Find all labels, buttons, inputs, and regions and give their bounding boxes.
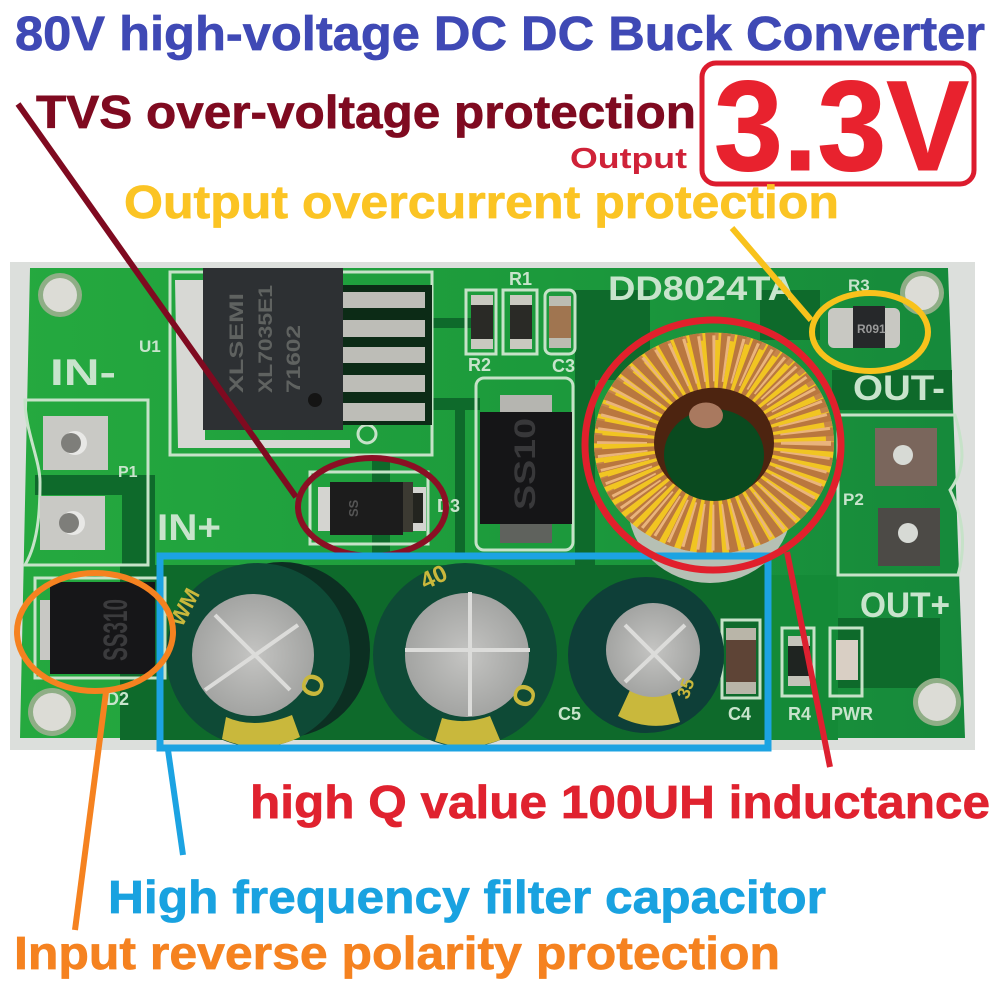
board outlines — [25, 272, 963, 698]
TVS diode: SS — [346, 499, 361, 517]
arrow: inductor pointer — [787, 552, 830, 767]
highlight: inductor — [585, 320, 841, 570]
title: 80V high-voltage DC DC Buck Converter — [15, 8, 985, 61]
board silk labels: IN- — [50, 352, 116, 393]
highlight: overcurrent resistor — [812, 293, 928, 371]
highlight: TVS diode — [298, 458, 446, 556]
board silk labels: P1 — [118, 464, 138, 481]
board silk labels: C5 — [558, 704, 581, 724]
input diode SS310 — [40, 582, 155, 674]
capacitor 1 — [164, 562, 370, 747]
board silk labels: R4 — [788, 704, 811, 724]
board silk labels: DD8024TA — [608, 270, 795, 308]
current sense resistor R3 — [828, 306, 900, 348]
highlight: input diode — [17, 573, 173, 691]
U1 regulator: XL7035E1 — [256, 284, 277, 393]
board silk labels: U1 — [139, 337, 161, 356]
board silk labels: C3 — [552, 356, 575, 376]
circuit board photo — [10, 262, 975, 750]
output voltage badge: 3.3V — [714, 55, 969, 198]
board silk labels: OUT+ — [860, 586, 950, 625]
board silk labels: R3 — [848, 276, 870, 295]
board silk labels: R1 — [509, 269, 532, 289]
label: input reverse polarity protection: Input reverse polarity protection — [14, 927, 780, 979]
capacitor 3 — [568, 577, 724, 733]
capacitor 1: O — [294, 669, 333, 703]
label: TVS over-voltage protection: TVS over-voltage protection — [36, 86, 696, 138]
U1 regulator: 71602 — [284, 325, 305, 393]
board silk labels: PWR — [831, 704, 873, 724]
SS10 diode — [480, 395, 572, 543]
current sense resistor R3: R091 — [857, 322, 886, 336]
label: Output: Output — [570, 143, 687, 175]
board silk labels — [50, 269, 950, 724]
label: high frequency filter capacitor: High frequency filter capacitor — [108, 871, 826, 923]
arrow: overcurrent pointer — [732, 228, 811, 320]
board silk labels: P2 — [843, 490, 864, 509]
toroid inductor — [594, 333, 834, 553]
dark traces — [35, 290, 952, 740]
board silk labels: C4 — [728, 704, 751, 724]
resistors and small caps — [471, 295, 858, 694]
board silk labels: IN+ — [157, 507, 221, 548]
board silk labels: OUT- — [853, 369, 945, 408]
pcb — [20, 268, 965, 738]
silver ring under inductor — [628, 427, 792, 583]
SS10 diode: SS10 — [509, 418, 542, 510]
arrow: reverse polarity pointer — [75, 692, 106, 930]
label: high Q value inductance: high Q value 100UH inductance — [250, 776, 990, 828]
capacitor 2: 40 — [416, 560, 452, 595]
capacitor 2 — [373, 560, 557, 747]
TVS diode — [318, 482, 426, 535]
board silk labels: D3 — [437, 496, 460, 516]
highlight: filter capacitors — [160, 556, 768, 748]
label: output overcurrent protection: Output overcurrent protection — [124, 176, 839, 228]
input terminal pads — [40, 416, 108, 550]
output terminal pads — [875, 428, 940, 566]
mounting holes — [28, 271, 961, 736]
capacitor 3: 35 — [673, 676, 699, 701]
capacitor 1: WM — [164, 584, 205, 630]
U1 regulator: XLSEMI — [227, 293, 248, 393]
board silk labels: R2 — [468, 355, 491, 375]
board silk labels: D2 — [106, 689, 129, 709]
U1 regulator — [175, 268, 432, 448]
capacitor 2: O — [506, 679, 545, 712]
input diode SS310: SS310 — [97, 599, 135, 661]
arrow: capacitor pointer — [168, 750, 183, 855]
arrow: TVS pointer — [18, 104, 296, 497]
